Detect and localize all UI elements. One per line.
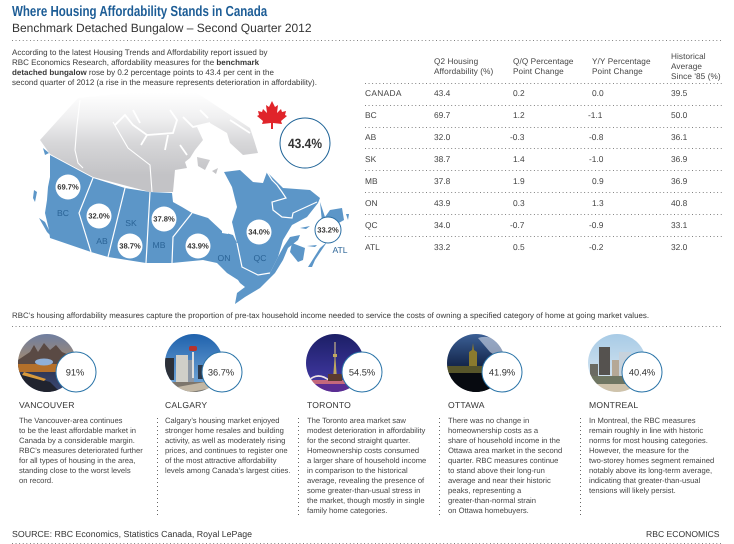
- row: AB: 36.1: [671, 132, 687, 142]
- intro text: [12, 48, 317, 87]
- city text: levels among Canada’s largest cities.: [165, 466, 290, 475]
- national average circle: 43.4%: [288, 136, 322, 151]
- city text: However, the measure for the: [589, 446, 689, 455]
- city text: tensions will likely persist.: [589, 486, 676, 495]
- map of Canada: [33, 101, 349, 304]
- city text: greater-than-normal strain: [448, 496, 536, 505]
- northern territories: [40, 93, 258, 192]
- city: Ottawa: [448, 400, 562, 515]
- intro text: second quarter of 2012 (a rise in the measure represents deterioration in affordability).: [12, 78, 317, 87]
- city text: standing close to the worst levels: [19, 466, 131, 475]
- intro text: RBC Economics Research, affordability measures for the benchmark: [12, 58, 259, 67]
- row: BC: 1.2: [513, 110, 525, 120]
- column headers: [434, 57, 493, 76]
- row: Canada: 43.4: [434, 88, 450, 98]
- row: ON: 43.9: [434, 198, 450, 208]
- row: Canada: CANADA: [365, 88, 402, 98]
- province circles and labels: BC: [57, 208, 69, 218]
- city text: [589, 416, 714, 495]
- row: ON: [365, 198, 687, 208]
- value labels: 91%: [66, 368, 84, 378]
- affordability table: Y/Y Percentage: [592, 57, 651, 66]
- city text: The Toronto area market saw: [307, 416, 406, 425]
- city text: RBC’s measures deteriorated further: [19, 446, 143, 455]
- city name: MONTREAL: [589, 400, 638, 410]
- province circles and labels: MB: [153, 240, 166, 250]
- city: Vancouver: [19, 400, 143, 485]
- city text: quarter. RBC measures continue: [448, 456, 558, 465]
- affordability table: Since '85 (%): [671, 72, 721, 81]
- city text: norms for most housing categories.: [589, 436, 708, 445]
- province circles and labels: 34.0%: [248, 228, 270, 236]
- city text: [165, 416, 290, 475]
- row: ATL: 33.2: [434, 242, 450, 252]
- row: QC: -0.7: [510, 220, 524, 230]
- city text: stronger home resales and building: [165, 426, 284, 435]
- city text: Ottawa area market in the second: [448, 446, 562, 455]
- city text: on Ottawa homebuyers.: [448, 506, 529, 515]
- row: ATL: 32.0: [671, 242, 687, 252]
- city text: on record.: [19, 476, 53, 485]
- row: ON: ON: [365, 198, 378, 208]
- row: SK: [365, 154, 687, 164]
- city text: peaks, representing a: [448, 486, 521, 495]
- city photo circles: [18, 334, 662, 392]
- publisher: RBC ECONOMICS: [646, 529, 720, 539]
- row: QC: -0.9: [589, 220, 603, 230]
- city text: homeownership costs as a: [448, 426, 538, 435]
- value labels: [66, 368, 655, 378]
- row: AB: [365, 132, 687, 142]
- city: Montreal: [589, 400, 714, 495]
- city text: to be the least affordable market in: [19, 426, 136, 435]
- province circles and labels: 33.2%: [317, 226, 339, 234]
- city text: share of household income in the: [448, 436, 560, 445]
- row: MB: 36.9: [671, 176, 687, 186]
- affordability table: Point Change: [592, 67, 643, 76]
- row: BC: BC: [365, 110, 377, 120]
- city text: indicating that greater-than-usual: [589, 476, 700, 485]
- city text: average and near their historic: [448, 476, 551, 485]
- city text: for all types of housing in the area,: [19, 456, 135, 465]
- city text: family home categories.: [307, 506, 387, 515]
- intro text: detached bungalow rose by 0.2 percentage points to 43.4 per cent in the: [12, 68, 274, 77]
- city text: some greater-than-usual stress in: [307, 486, 420, 495]
- city text: [448, 416, 562, 515]
- city text: Canada by a considerable margin.: [19, 436, 135, 445]
- province circles and labels: 32.0%: [88, 212, 110, 220]
- row: ON: 1.3: [592, 198, 604, 208]
- city text: [307, 416, 426, 515]
- row: AB: 32.0: [434, 132, 450, 142]
- row: MB: 0.9: [592, 176, 604, 186]
- city text: a larger share of household income: [307, 456, 426, 465]
- photo: Vancouver: [18, 334, 78, 394]
- row: SK: -1.0: [589, 154, 603, 164]
- province circles and labels: SK: [125, 218, 137, 228]
- row: BC: 50.0: [671, 110, 687, 120]
- city text: Calgary’s housing market enjoyed: [165, 416, 280, 425]
- province circles and labels: 37.8%: [153, 214, 175, 224]
- row: BC: 69.7: [434, 110, 450, 120]
- row: QC: 34.0: [434, 220, 450, 230]
- row: BC: -1.1: [588, 110, 602, 120]
- intro text: According to the latest Housing Trends and Affordability report issued by: [12, 48, 268, 57]
- affordability table: Point Change: [513, 67, 564, 76]
- city text: activity, as well as moderately rising: [165, 436, 285, 445]
- row: ON: 0.3: [513, 198, 525, 208]
- city name: TORONTO: [307, 400, 351, 410]
- row: ATL: 0.5: [513, 242, 525, 252]
- city text: There was no change in: [448, 416, 529, 425]
- city text: two-storey homes segment remained: [589, 456, 714, 465]
- city text: [19, 416, 143, 485]
- definition text: RBC’s housing affordability measures capture the proportion of pre-tax household income needed to service the costs of owning a specified category of home at going market values.: [12, 311, 649, 320]
- province circles and labels: 43.9%: [187, 242, 209, 250]
- city: Toronto: [307, 400, 426, 515]
- row: AB: -0.3: [510, 132, 524, 142]
- Ontario and the lower St Lawrence strip: [172, 213, 300, 304]
- row: MB: 37.8: [434, 176, 450, 186]
- province circles and labels: ON: [218, 253, 230, 263]
- row: SK: 38.7: [434, 154, 450, 164]
- city name: OTTAWA: [448, 400, 485, 410]
- row: Canada: [365, 88, 687, 98]
- row: SK: 1.4: [513, 154, 525, 164]
- value circles: [56, 352, 662, 392]
- city text: remain roughly in line with historic: [589, 426, 703, 435]
- icon: maple leaf: [257, 101, 287, 129]
- row: AB: -0.8: [589, 132, 603, 142]
- row: AB: AB: [365, 132, 376, 142]
- row: SK: 36.9: [671, 154, 687, 164]
- title: Where Housing Affordability Stands in Canada: [12, 4, 267, 20]
- value labels: 41.9%: [489, 368, 515, 378]
- affordability table: Historical: [671, 52, 706, 61]
- Atlantic provinces: [290, 202, 349, 267]
- city: Calgary: [165, 400, 290, 475]
- west coast islands: [33, 148, 53, 238]
- affordability table: Q/Q Percentage: [513, 57, 574, 66]
- province circles and labels: QC: [254, 253, 266, 263]
- affordability table: Average: [671, 62, 702, 71]
- photo: Toronto: [306, 334, 366, 394]
- photo: Ottawa: [447, 334, 507, 394]
- city text: average, revealing the presence of: [307, 476, 424, 485]
- row: BC: [365, 110, 687, 120]
- row: MB: MB: [365, 176, 378, 186]
- row: Canada: 39.5: [671, 88, 687, 98]
- row: QC: 33.1: [671, 220, 687, 230]
- subtitle: Benchmark Detached Bungalow – Second Quarter 2012: [12, 21, 312, 35]
- row: MB: 1.9: [513, 176, 525, 186]
- source: SOURCE: RBC Economics, Statistics Canada, Royal LePage: [12, 529, 252, 539]
- city text: in comparison to the historical: [307, 466, 408, 475]
- western provinces: [45, 155, 192, 263]
- Quebec and Labrador: [224, 170, 320, 275]
- city text: Homeownership costs consumed: [307, 446, 419, 455]
- value labels: 54.5%: [349, 368, 375, 378]
- city name: CALGARY: [165, 400, 207, 410]
- row: QC: QC: [365, 220, 378, 230]
- row: ON: 40.8: [671, 198, 687, 208]
- province circles and labels: [56, 174, 348, 263]
- province circles and labels: ATL: [332, 245, 348, 255]
- province circles and labels: 69.7%: [57, 182, 79, 192]
- province circles and labels: AB: [96, 236, 108, 246]
- row: SK: SK: [365, 154, 376, 164]
- city text: In Montreal, the RBC measures: [589, 416, 696, 425]
- row: Canada: 0.0: [592, 88, 604, 98]
- city text: to stand above their long-run: [448, 466, 545, 475]
- city text: modest deterioration in affordability: [307, 426, 425, 435]
- province circles and labels: 38.7%: [119, 242, 141, 250]
- city text: of the most attractive affordability: [165, 456, 277, 465]
- row: ATL: ATL: [365, 242, 380, 252]
- national average circle: [280, 118, 330, 168]
- column headers: Affordability (%): [434, 67, 493, 76]
- row: Canada: 0.2: [513, 88, 525, 98]
- city text: for the second straight quarter.: [307, 436, 410, 445]
- city text: the market, though mostly in single: [307, 496, 425, 505]
- column headers: Q2 Housing: [434, 57, 478, 66]
- value labels: 40.4%: [629, 368, 655, 378]
- row: ATL: -0.2: [589, 242, 603, 252]
- affordability table: [434, 52, 721, 81]
- city text: prices, and continues to register one: [165, 446, 288, 455]
- photo: Calgary: [165, 334, 225, 394]
- row: MB: [365, 176, 687, 186]
- row: QC: [365, 220, 687, 230]
- city text: The Vancouver-area continues: [19, 416, 122, 425]
- provinces in blue: [33, 148, 349, 304]
- row: ATL: [365, 242, 687, 252]
- city name: VANCOUVER: [19, 400, 75, 410]
- city text: notably above its long-term average,: [589, 466, 712, 475]
- value labels: 36.7%: [208, 368, 234, 378]
- photo: Montreal: [588, 334, 648, 394]
